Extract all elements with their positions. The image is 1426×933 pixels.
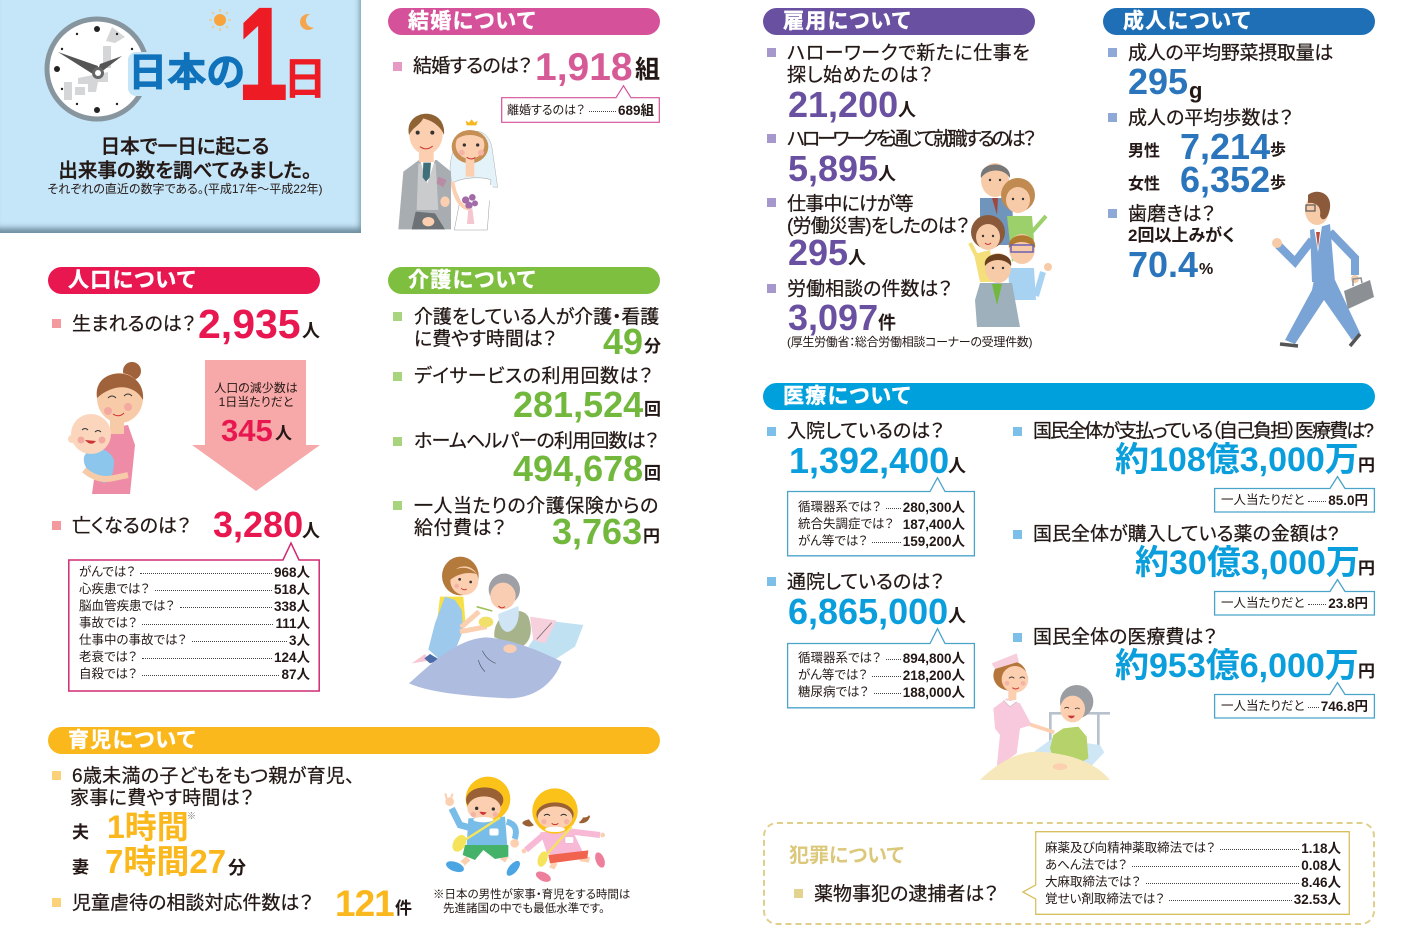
heading: 介護について bbox=[408, 269, 536, 292]
callout: causes of death: 心疾患では？ bbox=[79, 582, 150, 596]
illustration: nurse and patient bbox=[980, 654, 1110, 780]
text: question: 結婚するのは？ bbox=[413, 56, 531, 77]
bullet bbox=[393, 437, 402, 446]
number: 494,678 bbox=[513, 448, 643, 489]
bullet bbox=[393, 372, 402, 381]
callout: drug arrests: あへん法では？ bbox=[1045, 858, 1127, 872]
callout: inpatient breakdown: 159,200人 bbox=[903, 534, 965, 549]
text: subtitle bbox=[58, 136, 312, 182]
unit: 円 bbox=[1358, 559, 1375, 578]
callout: drug arrests bbox=[1022, 831, 1350, 915]
bullet bbox=[1013, 530, 1022, 539]
callout: per capita: 85.0円 bbox=[1328, 493, 1368, 508]
bullet bbox=[767, 48, 776, 57]
number: men steps: 7,214 bbox=[1180, 126, 1270, 167]
illustration: caregiver feeding elder bbox=[409, 556, 584, 698]
unit: 件 bbox=[878, 313, 896, 333]
number: 1,392,400 bbox=[789, 440, 949, 481]
panel: medical bbox=[763, 383, 1376, 780]
panel: childcare bbox=[48, 727, 660, 924]
callout: causes of death: 事故では？ bbox=[79, 616, 137, 630]
callout: per capita bbox=[1214, 578, 1376, 616]
unit: g bbox=[1189, 78, 1202, 103]
label: women: 女性 bbox=[1128, 176, 1160, 193]
heading: 医療について bbox=[783, 385, 911, 408]
unit: 人 bbox=[275, 424, 292, 443]
text: question: 生まれるのは？ bbox=[72, 314, 196, 335]
heading bbox=[1103, 8, 1375, 35]
callout: divorce: 離婚するのは？ bbox=[507, 103, 585, 117]
number: 70.4 bbox=[1128, 244, 1198, 285]
text: question: 国民全体の医療費は？ bbox=[1033, 627, 1217, 648]
callout: inpatient breakdown bbox=[786, 476, 976, 556]
text: question bbox=[70, 766, 355, 809]
text: question: 薬物事犯の逮捕者は？ bbox=[814, 884, 998, 905]
text: footnote: 先進諸国の中でも最低水準です。 bbox=[443, 903, 605, 915]
label: husband: 夫 bbox=[72, 823, 89, 842]
text: footnote bbox=[433, 888, 630, 915]
unit: 円 bbox=[643, 527, 660, 546]
panel: population bbox=[48, 267, 320, 692]
heading: 育児について bbox=[68, 729, 196, 752]
number: 3,763 bbox=[552, 511, 642, 552]
unit: % bbox=[1199, 261, 1213, 278]
bullet bbox=[52, 898, 61, 907]
number: 295 bbox=[1128, 61, 1188, 102]
bullet bbox=[767, 198, 776, 207]
heading bbox=[48, 727, 660, 754]
number: 1,918: 1,918 bbox=[535, 46, 633, 89]
text: question: 亡くなるのは？ bbox=[72, 516, 191, 537]
unit: 回 bbox=[644, 464, 661, 483]
bullet bbox=[767, 284, 776, 293]
bullet bbox=[1108, 48, 1117, 57]
callout: causes of death: 111人 bbox=[275, 616, 310, 631]
number: husband time: 1時間 bbox=[107, 809, 189, 845]
text: question: 6歳未満の子どもをもつ親が育児、 bbox=[72, 766, 355, 787]
unit: 分 bbox=[228, 858, 246, 878]
callout: outpatient breakdown: 188,000人 bbox=[903, 685, 965, 700]
panel: adults bbox=[1103, 8, 1375, 348]
callout: drug arrests: 1.18人 bbox=[1301, 841, 1341, 856]
number: 121: 121 bbox=[335, 883, 394, 924]
illustration: two children bbox=[444, 776, 605, 882]
text: question: 給付費は？ bbox=[414, 518, 506, 539]
panel: nursing care bbox=[388, 267, 661, 698]
bullet bbox=[1108, 113, 1117, 122]
bullet bbox=[52, 319, 61, 328]
number: wife time: 7時間27 bbox=[105, 843, 226, 880]
callout: inpatient breakdown: がん等では？ bbox=[798, 534, 867, 548]
number: 約108億3,000万 bbox=[1115, 441, 1359, 479]
unit: 件 bbox=[395, 899, 412, 918]
number: 約953億6,000万 bbox=[1115, 647, 1359, 685]
heading: 成人について bbox=[1123, 10, 1251, 33]
text: question: ハローワークで新たに仕事を bbox=[787, 43, 1030, 64]
bullet bbox=[794, 889, 803, 898]
callout: divorce: 689組 bbox=[618, 103, 654, 118]
text: question: 成人の平均野菜摂取量は bbox=[1128, 43, 1333, 64]
heading bbox=[388, 267, 660, 294]
bullet bbox=[767, 577, 776, 586]
text: source: (厚生労働省：総合労働相談コーナーの受理件数) bbox=[787, 335, 1032, 349]
heading bbox=[763, 383, 1375, 410]
text: footnote: ※日本の男性が家事・育児をする時間は bbox=[433, 889, 630, 901]
bullet bbox=[52, 521, 61, 530]
illustration: walking businessman bbox=[1272, 192, 1374, 348]
heading: 人口について bbox=[68, 269, 196, 292]
text: question: 入院しているのは？ bbox=[787, 421, 944, 442]
arrow: population decrease bbox=[192, 360, 320, 491]
callout: outpatient breakdown: 218,200人 bbox=[903, 668, 965, 683]
heading: 結婚について bbox=[408, 10, 536, 33]
heading: 雇用について bbox=[783, 10, 911, 33]
heading bbox=[388, 8, 660, 35]
callout: causes of death: 仕事中の事故では？ bbox=[79, 633, 187, 647]
label: wife: 妻 bbox=[72, 858, 89, 877]
number: women steps: 6,352 bbox=[1180, 159, 1270, 200]
text: question: ハローワークを通じて就職するのは？ bbox=[787, 129, 1033, 150]
text: question: 介護をしている人が介護・看護 bbox=[414, 307, 659, 328]
callout: causes of death: 老衰では？ bbox=[79, 650, 137, 664]
unit: 人 bbox=[948, 456, 966, 476]
text: question: 一人当たりの介護保険からの bbox=[414, 496, 659, 517]
callout: causes of death: がんでは？ bbox=[79, 565, 135, 579]
text: question: デイサービスの利用回数は？ bbox=[414, 366, 653, 387]
callout: causes of death: 3人 bbox=[289, 633, 310, 648]
callout: drug arrests: 8.46人 bbox=[1301, 875, 1341, 890]
text: question: 家事に費やす時間は？ bbox=[70, 788, 254, 809]
callout: drug arrests: 0.08人 bbox=[1301, 858, 1341, 873]
callout: outpatient breakdown: 循環器系では？ bbox=[798, 651, 881, 665]
text: question: 労働相談の件数は？ bbox=[787, 279, 952, 300]
text: question bbox=[414, 306, 659, 350]
callout: drug arrests: 32.53人 bbox=[1294, 892, 1341, 907]
unit: 人 bbox=[948, 606, 966, 626]
text: question bbox=[787, 194, 969, 237]
text: question: (労働災害)をしたのは？ bbox=[787, 216, 969, 237]
text: question bbox=[787, 42, 1030, 86]
title: 日本の: 日本の bbox=[128, 52, 245, 95]
callout: causes of death: 338人 bbox=[274, 599, 310, 614]
illustration: bride and groom bbox=[398, 114, 498, 230]
number: deaths: 3,280 bbox=[213, 504, 303, 545]
text: note: それぞれの直近の数字である。(平成17年～平成22年) bbox=[47, 182, 323, 196]
panel: title header bbox=[0, 0, 361, 233]
text: question: 国民全体が支払っている（自己負担）医療費は? bbox=[1033, 421, 1372, 442]
callout: causes of death: 518人 bbox=[274, 582, 310, 597]
callout: per capita: 一人当たりだと bbox=[1221, 596, 1305, 610]
callout: outpatient breakdown bbox=[786, 627, 976, 708]
text: subtitle: 出来事の数を調べてみました。 bbox=[58, 160, 312, 182]
unit: 歩 bbox=[1270, 142, 1286, 159]
number: 約30億3,000万 bbox=[1135, 544, 1360, 582]
note mark: ※ bbox=[187, 811, 196, 821]
bullet bbox=[393, 62, 402, 71]
callout: divorce bbox=[501, 84, 660, 123]
callout: outpatient breakdown: 894,800人 bbox=[903, 651, 965, 666]
panel: marriage bbox=[388, 8, 660, 230]
callout: drug arrests: 大麻取締法では？ bbox=[1045, 875, 1141, 889]
number: 49 bbox=[603, 321, 643, 362]
text: question: ホームヘルパーの利用回数は？ bbox=[414, 431, 658, 452]
callout: outpatient breakdown: がん等では？ bbox=[798, 668, 867, 682]
text: question: 成人の平均歩数は？ bbox=[1128, 108, 1293, 129]
unit: 人 bbox=[848, 248, 866, 268]
text: question: 探し始めたのは？ bbox=[787, 65, 933, 86]
callout: inpatient breakdown: 280,300人 bbox=[903, 500, 965, 515]
callout: causes of death: 脳血管疾患では？ bbox=[79, 599, 175, 613]
callout: outpatient breakdown: 糖尿病では？ bbox=[798, 685, 869, 699]
callout: causes of death: 87人 bbox=[281, 667, 310, 682]
number: 6,865,000 bbox=[788, 591, 948, 632]
bullet bbox=[52, 771, 61, 780]
text: question: 通院しているのは？ bbox=[787, 572, 944, 593]
callout: per capita bbox=[1214, 476, 1376, 513]
callout: per capita: 一人当たりだと bbox=[1221, 699, 1305, 713]
icon: clock with map of Japan bbox=[44, 16, 147, 122]
unit: 人 bbox=[898, 100, 916, 120]
text: subtitle: 日本で一日に起こる bbox=[101, 136, 269, 158]
text: question bbox=[414, 496, 659, 539]
text: arrow label: 人口の減少数は bbox=[214, 381, 298, 395]
bullet bbox=[767, 427, 776, 436]
text: question: 国民全体が購入している薬の金額は? bbox=[1033, 524, 1338, 545]
number: 3,097 bbox=[788, 297, 878, 338]
unit: 人 bbox=[302, 321, 320, 341]
unit: 円 bbox=[1358, 456, 1375, 475]
callout: inpatient breakdown: 187,400人 bbox=[903, 517, 965, 532]
illustration: mother and baby bbox=[68, 362, 144, 494]
text: question: に費やす時間は？ bbox=[414, 329, 556, 350]
panel: crime bbox=[763, 822, 1375, 925]
number: 21,200 bbox=[788, 84, 898, 125]
illustration: group of workers bbox=[968, 163, 1052, 327]
number: 345: 345 bbox=[221, 413, 273, 448]
bullet bbox=[767, 134, 776, 143]
bullet bbox=[1013, 633, 1022, 642]
title: 日: 日 bbox=[283, 55, 327, 104]
callout: per capita: 一人当たりだと bbox=[1221, 493, 1305, 507]
text: question: 仕事中にけが等 bbox=[787, 194, 913, 215]
text: question: 歯磨きは？ bbox=[1128, 204, 1215, 225]
bullet bbox=[393, 312, 402, 321]
number: 5,895 bbox=[788, 148, 878, 189]
text: answer label: 2回以上みがく bbox=[1128, 226, 1235, 245]
text: arrow label bbox=[214, 381, 298, 409]
bullet bbox=[393, 501, 402, 510]
callout: causes of death: 124人 bbox=[274, 650, 310, 665]
unit: 人 bbox=[878, 164, 896, 184]
bullet bbox=[1013, 427, 1022, 436]
unit: 円 bbox=[1358, 662, 1375, 681]
callout: causes of death: 968人 bbox=[274, 565, 310, 580]
unit: 組 bbox=[635, 56, 660, 84]
number: 281,524 bbox=[513, 384, 643, 425]
label: men: 男性 bbox=[1128, 143, 1160, 160]
callout: per capita bbox=[1214, 682, 1376, 719]
text: question: 児童虐待の相談対応件数は？ bbox=[72, 893, 313, 914]
callout: inpatient breakdown: 循環器系では？ bbox=[798, 500, 881, 514]
heading bbox=[48, 267, 320, 294]
unit: 歩 bbox=[1270, 175, 1286, 192]
callout: drug arrests: 覚せい剤取締法では？ bbox=[1045, 892, 1164, 906]
callout: per capita: 23.8円 bbox=[1328, 596, 1368, 611]
callout: drug arrests: 麻薬及び向精神薬取締法では？ bbox=[1045, 841, 1215, 855]
panel: employment bbox=[763, 8, 1052, 349]
unit: 人 bbox=[302, 521, 320, 541]
icon: moon bbox=[300, 14, 314, 30]
text: arrow label: 1日当たりだと bbox=[219, 395, 293, 409]
unit: 回 bbox=[644, 400, 661, 419]
bullet bbox=[1108, 209, 1117, 218]
unit: 分 bbox=[644, 337, 661, 356]
heading: 犯罪について bbox=[789, 845, 904, 867]
icon: sun bbox=[209, 9, 231, 31]
callout: causes of death bbox=[68, 541, 320, 692]
callout: per capita: 746.8円 bbox=[1321, 699, 1368, 714]
callout: inpatient breakdown: 統合失調症では？ bbox=[798, 517, 894, 531]
number: births: 2,935 bbox=[198, 301, 301, 347]
heading bbox=[763, 8, 1035, 35]
callout: causes of death: 自殺では？ bbox=[79, 667, 137, 681]
number: 295 bbox=[788, 232, 848, 273]
